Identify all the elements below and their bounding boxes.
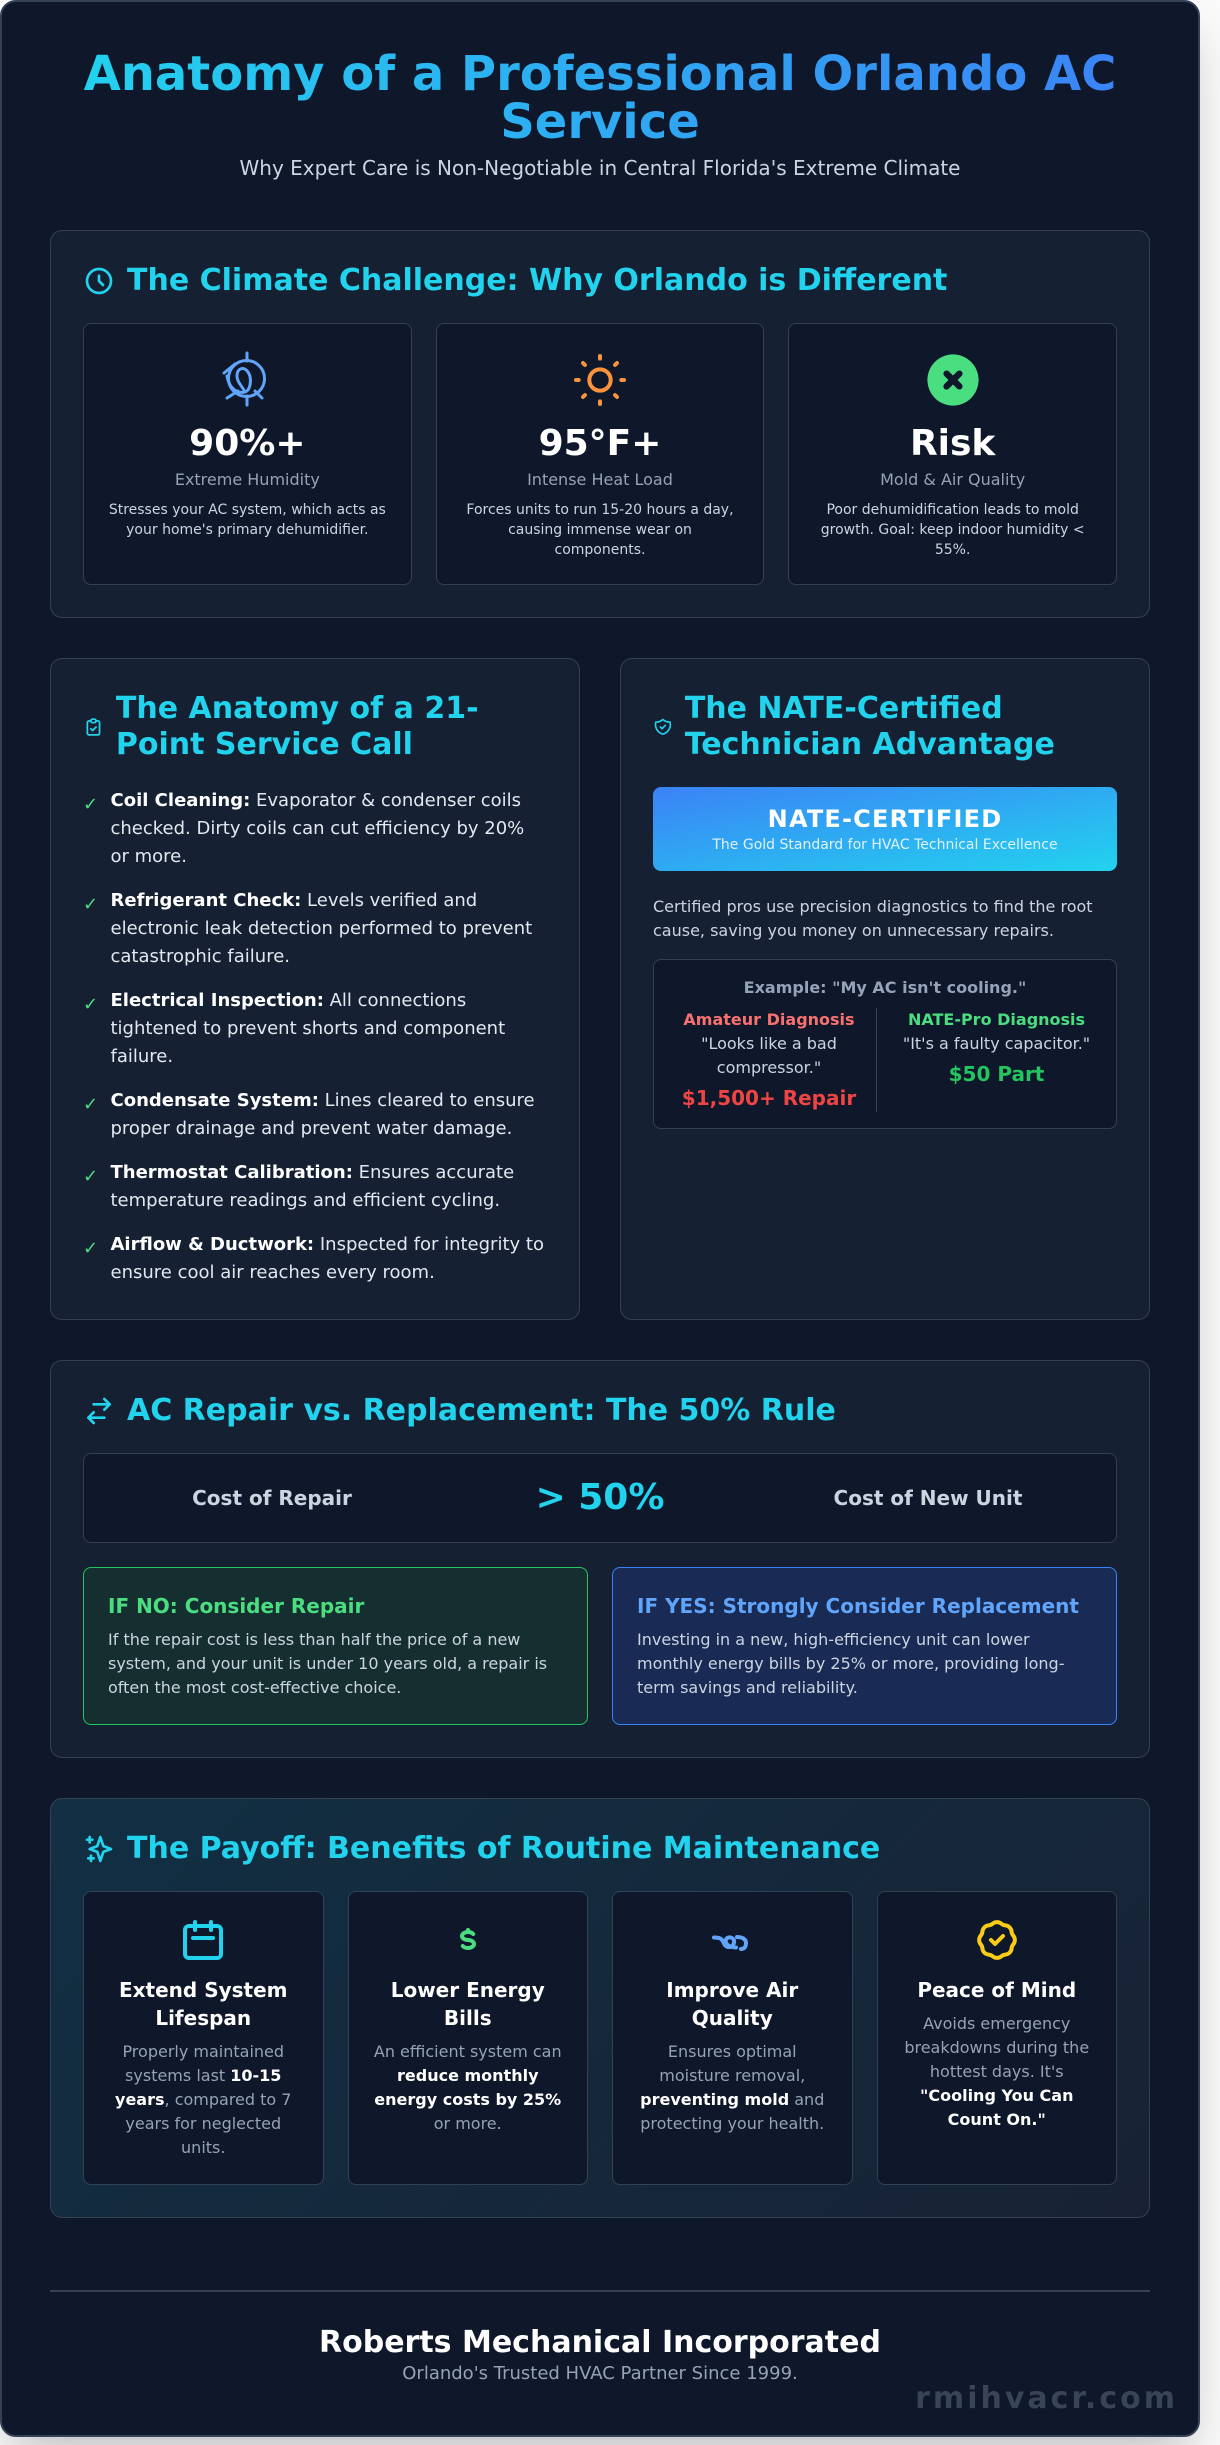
outcome cards — [83, 1567, 1117, 1725]
amateur diagnosis: $1,500+ Repair — [682, 1086, 856, 1110]
checklist: ✓ — [83, 894, 98, 915]
heading: climate challenge — [86, 263, 947, 298]
card: lower energy bills — [348, 1891, 588, 2185]
watermark: rmihvacr.com — [915, 2381, 1178, 2416]
card: improve air quality: Ensures optimal moisture removal, preventing mold and protecting your health. — [640, 2042, 824, 2133]
card: intense heat load — [436, 323, 764, 585]
card: consider replacement — [612, 1567, 1117, 1725]
checklist: Airflow & Ductwork: Inspected for integrity to ensure cool air reaches every room. — [110, 1234, 544, 1283]
card: consider replacement: IF YES: Strongly Consider Replacement — [637, 1594, 1079, 1618]
panel: 21-point service call — [50, 658, 580, 1320]
checklist: ✓ — [83, 1094, 98, 1115]
panel: repair vs replacement — [50, 1360, 1150, 1758]
50% rule formula: Cost of Repair — [192, 1486, 352, 1510]
stat value: 90%+ — [189, 423, 306, 464]
card: extend system lifespan — [83, 1891, 324, 2185]
NATE-pro diagnosis — [903, 1010, 1090, 1086]
icon: air swirl — [712, 1935, 748, 1951]
stat label: Mold & Air Quality — [880, 470, 1025, 489]
card: extreme humidity — [83, 323, 412, 585]
company name: Roberts Mechanical Incorporated — [319, 2325, 881, 2360]
icon: clock — [86, 268, 112, 294]
NATE-pro diagnosis: "It's a faulty capacitor." — [903, 1034, 1090, 1053]
icon: clipboard check — [86, 718, 100, 736]
checklist: Coil Cleaning: Evaporator & condenser coils checked. Dirty coils can cut efficiency by 20% or more. — [110, 790, 524, 867]
icon: calendar — [183, 1920, 223, 1960]
panel: NATE-certified advantage — [620, 658, 1150, 1320]
panel: climate challenge — [50, 230, 1150, 618]
card: consider replacement: Investing in a new, high-efficiency unit can lower monthly energy bills by 25% or more, providing long-term savings and reliability. — [637, 1630, 1064, 1697]
card: peace of mind: Avoids emergency breakdowns during the hottest days. It's "Cooling You Can Count On." — [904, 2014, 1089, 2129]
stat value: 95°F+ — [539, 423, 661, 464]
checklist: Thermostat Calibration: Ensures accurate temperature readings and efficient cycling. — [110, 1162, 514, 1211]
banner: NATE-certified: The Gold Standard for HVAC Technical Excellence — [712, 837, 1058, 853]
stat description: Poor dehumidification leads to mold growth. Goal: keep indoor humidity < 55%. — [821, 502, 1085, 558]
footer — [50, 2290, 1150, 2388]
NATE-pro diagnosis: NATE-Pro Diagnosis — [908, 1010, 1085, 1029]
heading text: AC Repair vs. Replacement: The 50% Rule — [127, 1393, 836, 1428]
card: mold and air quality — [788, 323, 1117, 585]
icon: x circle — [927, 354, 979, 406]
icon: dollar — [460, 1928, 476, 1950]
card: lower energy bills: Lower Energy Bills — [391, 1978, 545, 2030]
checklist: Electrical Inspection: All connections tightened to prevent shorts and component failure. — [110, 990, 505, 1067]
stat label: Intense Heat Load — [527, 470, 673, 489]
stat label: Extreme Humidity — [175, 470, 320, 489]
stat description: Forces units to run 15-20 hours a day, causing immense wear on components. — [466, 502, 734, 558]
icon: badge check — [977, 1920, 1017, 1960]
card: peace of mind — [876, 1891, 1117, 2185]
heading text: The NATE-Certified Technician Advantage — [685, 691, 1055, 762]
checklist: ✓ — [83, 794, 98, 815]
card: improve air quality — [612, 1891, 852, 2185]
50% rule formula: Cost of New Unit — [834, 1486, 1022, 1510]
icon: sparkles — [86, 1836, 112, 1862]
icon: shield check — [654, 718, 672, 735]
banner: NATE-certified: NATE-CERTIFIED — [768, 805, 1002, 833]
tagline: Orlando's Trusted HVAC Partner Since 1999. — [402, 2363, 798, 2384]
checklist: Condensate System: Lines cleared to ensure proper drainage and prevent water damage. — [110, 1090, 535, 1139]
benefit cards — [83, 1891, 1117, 2185]
card: improve air quality: Improve Air Quality — [666, 1978, 798, 2030]
two column row — [50, 658, 1150, 1320]
example comparison: Example: "My AC isn't cooling." — [744, 978, 1026, 997]
checklist: ✓ — [83, 994, 98, 1015]
example comparison — [653, 959, 1117, 1129]
checklist — [83, 790, 544, 1283]
subtitle: Why Expert Care is Non-Negotiable in Central Florida's Extreme Climate — [240, 156, 960, 180]
climate stat cards — [83, 323, 1117, 585]
card: consider repair: If the repair cost is less than half the price of a new system, and your unit is under 10 years old, a repair is often the most cost-effective choice. — [108, 1630, 547, 1697]
icon: humidity — [222, 352, 266, 406]
amateur diagnosis: Amateur Diagnosis — [683, 1010, 855, 1029]
50% rule formula: > 50% — [536, 1477, 664, 1518]
heading text: The Climate Challenge: Why Orlando is Different — [127, 263, 947, 298]
banner: NATE-certified — [653, 787, 1117, 871]
heading text: The Payoff: Benefits of Routine Maintenance — [127, 1831, 880, 1866]
card: consider repair: IF NO: Consider Repair — [108, 1594, 364, 1618]
heading: 50% rule — [86, 1393, 836, 1428]
card: consider repair — [83, 1567, 588, 1725]
stat value: Risk — [910, 423, 995, 464]
text: certified pros: Certified pros use precision diagnostics to find the root cause, saving you money on unnecessary repairs. — [653, 897, 1093, 940]
icon: sun — [574, 354, 626, 406]
header — [84, 46, 1116, 180]
panel: payoff benefits — [50, 1798, 1150, 2218]
checklist: Refrigerant Check: Levels verified and electronic leak detection performed to prevent catastrophic failure. — [110, 890, 532, 967]
heading: service call — [86, 691, 479, 762]
card: lower energy bills: An efficient system can reduce monthly energy costs by 25% or more. — [374, 2042, 562, 2133]
stat description: Stresses your AC system, which acts as your home's primary dehumidifier. — [109, 502, 386, 538]
amateur diagnosis: "Looks like a bad compressor." — [701, 1034, 837, 1077]
amateur diagnosis — [670, 1008, 877, 1112]
card: extend system lifespan: Properly maintained systems last 10-15 years, compared to 7 years for neglected units. — [115, 2042, 291, 2157]
heading: NATE advantage — [654, 691, 1055, 762]
heading text: The Anatomy of a 21-Point Service Call — [116, 691, 479, 762]
icon: switch arrows — [86, 1398, 112, 1424]
heading: payoff — [86, 1831, 880, 1866]
card: extend system lifespan: Extend System Lifespan — [119, 1978, 288, 2030]
checklist: ✓ — [83, 1238, 98, 1259]
title: Anatomy of a Professional Orlando AC Service — [84, 46, 1116, 150]
card: peace of mind: Peace of Mind — [917, 1978, 1076, 2002]
50% rule formula — [83, 1453, 1117, 1543]
checklist: ✓ — [83, 1166, 98, 1187]
NATE-pro diagnosis: $50 Part — [949, 1062, 1044, 1086]
